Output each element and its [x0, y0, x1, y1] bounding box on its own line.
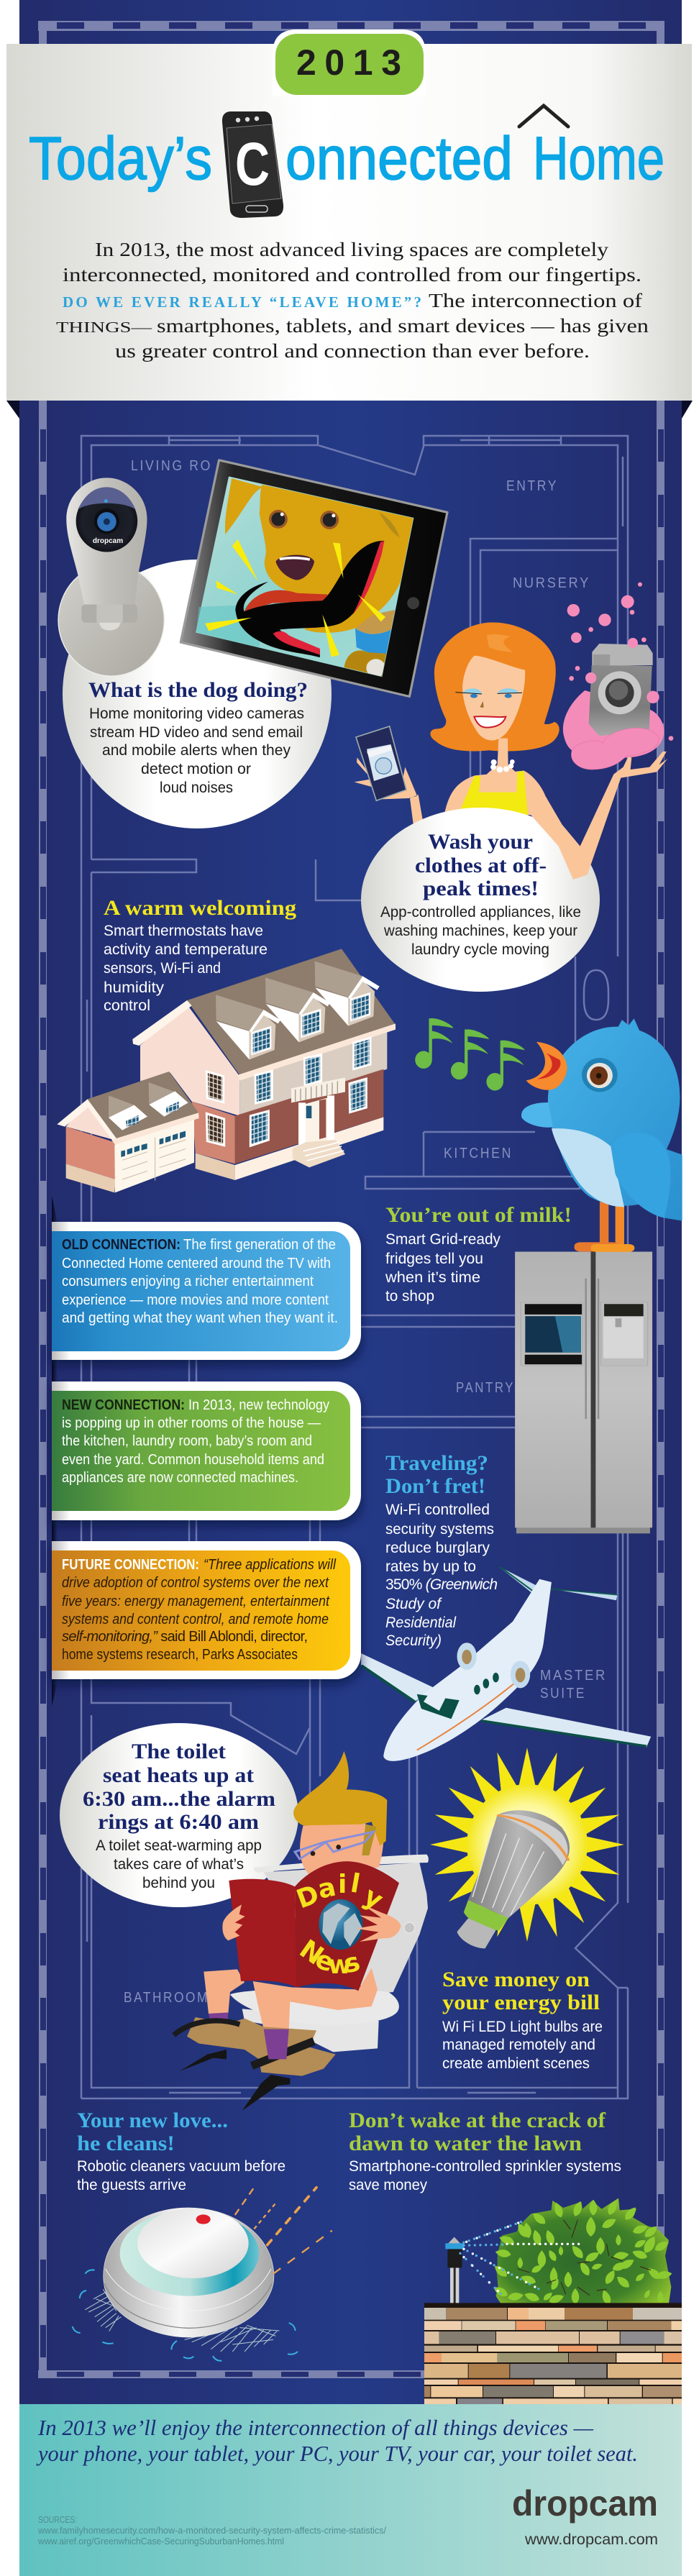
- text: milk: to shop: [385, 1288, 434, 1305]
- heading: your new love: Your new love...: [77, 2109, 228, 2132]
- icon: LED bulb: [430, 1748, 624, 1948]
- icon: tablet with dog: [181, 460, 447, 697]
- title: Home: [533, 124, 664, 192]
- stairs: [293, 1140, 345, 1167]
- body: [104, 2208, 274, 2337]
- panel: future connection: five years: energy management, entertainment: [62, 1594, 330, 1609]
- text: warm welcoming: activity and temperature: [104, 941, 268, 958]
- text: warm welcoming: control: [104, 997, 150, 1014]
- sources: [37, 2514, 386, 2547]
- heading: save money: your energy bill: [442, 1991, 600, 2014]
- icon: robot vacuum: [73, 2188, 332, 2361]
- foam front: [572, 728, 659, 769]
- panel: old connection: OLD CONNECTION:: [62, 1237, 181, 1253]
- icon: bluebird: [521, 1018, 682, 1252]
- text: save money: [442, 2019, 603, 2072]
- icon: house: [57, 949, 396, 1192]
- gable trim: [132, 1000, 192, 1046]
- text: wash: laundry cycle moving: [411, 941, 549, 958]
- text: don't wake: save money: [349, 2177, 427, 2193]
- icon: jet plane: [361, 1567, 651, 1761]
- hands: [222, 1904, 245, 1940]
- icon: dropcam camera: [58, 478, 164, 676]
- text: milk: [385, 1231, 501, 1305]
- text: milk: fridges tell you: [385, 1251, 483, 1267]
- text: traveling: reduce burglary: [385, 1540, 490, 1556]
- text: traveling: Security): [385, 1632, 442, 1649]
- intro paragraph: [56, 239, 649, 362]
- shoes: [180, 2050, 227, 2071]
- title: Today’s: [29, 124, 212, 192]
- heading: don't wake: [349, 2109, 606, 2155]
- front windows: [250, 1038, 370, 1146]
- heading: a warm welcoming: A warm welcoming: [104, 896, 296, 920]
- intro paragraph: DO WE EVER REALLY “LEAVE HOME”?: [63, 293, 421, 311]
- text: save money: managed remotely and: [442, 2037, 595, 2053]
- panel: new connection: [52, 1381, 362, 1526]
- sources: www.familyhomesecurity.com/how-a-monitored-security-system-affects-crime-statistics/: [37, 2525, 386, 2536]
- panel: new connection: the kitchen, laundry room, baby’s room and: [62, 1433, 312, 1449]
- icon: phone forming the letter C: [222, 111, 283, 218]
- text: save money: Wi Fi LED Light bulbs are: [442, 2019, 603, 2035]
- icon: music notes: [415, 1018, 525, 1090]
- heading: traveling: Traveling?: [385, 1451, 488, 1475]
- heading: toilet seat: 6:30 am...the alarm: [83, 1787, 275, 1811]
- banner folds: [6, 401, 19, 419]
- text: your new love: Robotic cleaners vacuum before: [77, 2158, 285, 2175]
- header banner: [6, 29, 693, 419]
- heading: save money: Save money on: [442, 1968, 590, 1991]
- icon: phone: [356, 726, 406, 800]
- intro paragraph: us greater control and connection than ever before.: [115, 340, 590, 362]
- label: living room: LIVING RO: [131, 458, 212, 474]
- bubble: toilet seat: [60, 1723, 298, 1907]
- columns: [298, 1102, 306, 1149]
- heading: toilet seat: The toilet: [132, 1740, 226, 1763]
- text: milk: when it’s time: [385, 1269, 480, 1286]
- text: traveling: Study of: [385, 1596, 442, 1612]
- panel: new connection: NEW CONNECTION:: [62, 1397, 185, 1413]
- woman's raised arm: [530, 752, 667, 880]
- necklace: [490, 759, 515, 772]
- text: milk: Smart Grid-ready: [385, 1231, 501, 1248]
- camera brand: dropcam: [93, 537, 123, 545]
- panel: new connection: even the yard. Common household items and: [62, 1452, 324, 1468]
- label: bathroom: BATHROOM: [124, 1990, 209, 2006]
- heading: your new love: [77, 2109, 228, 2155]
- label: entry: ENTRY: [506, 478, 558, 494]
- label: master suite: MASTER: [540, 1668, 607, 1684]
- heading: don't wake: Don’t wake at the crack of: [349, 2109, 606, 2132]
- text: toilet seat: behind you: [142, 1875, 215, 1891]
- text: toilet seat: A toilet seat-warming app: [96, 1837, 262, 1854]
- toilet: [230, 1855, 429, 2052]
- heading: wash your clothes: peak times!: [423, 877, 539, 900]
- text: wash: App-controlled appliances, like: [380, 904, 581, 921]
- panel: future connection: self-monitoring,” said Bill Ablondi, director,: [62, 1629, 308, 1645]
- text: dog: and mobile alerts when they: [102, 742, 291, 759]
- newspaper title: Daily: Daily: [293, 1868, 388, 1916]
- panel: future connection: FUTURE CONNECTION:: [62, 1557, 199, 1573]
- text: dog: loud noises: [160, 780, 233, 796]
- left arm and hand: [354, 757, 423, 826]
- legs: [204, 1968, 378, 2032]
- panel: new connection: appliances are now connected machines.: [62, 1470, 298, 1486]
- intro paragraph: smartphones, tablets, and smart devices — has given: [157, 315, 649, 337]
- text: traveling: security systems: [385, 1521, 494, 1538]
- mouth: [474, 716, 506, 728]
- side windows: [206, 1072, 224, 1146]
- text: warm welcoming: [104, 923, 268, 1014]
- panel: old connection: experience — more movies and more content: [62, 1292, 329, 1308]
- icon: phone forming the letter C: C: [235, 130, 270, 198]
- heading: don't wake: dawn to water the lawn: [349, 2132, 582, 2155]
- hair: [430, 623, 559, 752]
- dust marks: [73, 2270, 298, 2361]
- title: onnected: [285, 124, 513, 192]
- text: traveling: Wi-Fi controlled: [385, 1502, 490, 1518]
- text: dog: detect motion or: [141, 761, 251, 777]
- heading: wash your clothes: [415, 830, 547, 900]
- icon: washing machine: [589, 644, 653, 736]
- text: warm welcoming: sensors, Wi-Fi and: [104, 960, 221, 977]
- panel: old connection: Connected Home centered around the TV with: [62, 1256, 331, 1271]
- intro paragraph: In 2013, the most advanced living spaces are completely: [95, 239, 609, 260]
- icon: sprinkler: [445, 2237, 464, 2303]
- label: pantry: PANTRY: [456, 1380, 515, 1396]
- panel: new connection: In 2013, new technology: [188, 1397, 329, 1413]
- garage: [88, 1072, 198, 1141]
- panel: old connection: [52, 1222, 362, 1366]
- motion dashes: [235, 2188, 332, 2274]
- sources: SOURCES:: [38, 2514, 77, 2525]
- icon: shrub: [492, 2198, 672, 2306]
- intro paragraph: interconnected, monitored and controlled from our fingertips.: [63, 264, 641, 286]
- text: wash: washing machines, keep your: [383, 923, 577, 939]
- icon: roof chevron: [519, 106, 568, 127]
- icon: bubbles: [567, 583, 673, 741]
- intro paragraph: THINGS—: [56, 319, 152, 336]
- balcony: [291, 1077, 345, 1102]
- eyes: [462, 688, 482, 694]
- icon: foam cloud: [563, 690, 664, 769]
- porch door: [306, 1098, 327, 1142]
- eye: [582, 1058, 618, 1092]
- panel: future connection: systems and content control, and remote home: [62, 1612, 329, 1627]
- text: toilet seat: [96, 1837, 262, 1891]
- text: dog: [89, 705, 304, 796]
- foundation: [196, 1153, 235, 1180]
- wing right: [611, 1133, 670, 1218]
- belly: [552, 1128, 624, 1207]
- heading: what is the dog doing: What is the dog doing?: [88, 678, 308, 702]
- sprinkler water spray: [460, 2221, 582, 2298]
- closing statement: In 2013 we’ll enjoy the interconnection of all things devices —: [37, 2415, 593, 2440]
- lower brick walls: [235, 1069, 383, 1164]
- ring: [120, 2211, 259, 2296]
- closing statement: your phone, your tablet, your PC, your TV, your car, your toilet seat.: [36, 2441, 638, 2466]
- legs: [600, 1202, 608, 1246]
- panel: new connection: is popping up in other rooms of the house —: [62, 1415, 321, 1431]
- panel: old connection: consumers enjoying a richer entertainment: [62, 1274, 314, 1289]
- text: traveling: rates by up to: [385, 1558, 476, 1575]
- text: traveling: Residential: [385, 1614, 457, 1631]
- year pill: 2013: [296, 42, 401, 83]
- text: traveling: [385, 1502, 498, 1649]
- bubble: what is the dog doing: [63, 559, 332, 828]
- belts: [174, 2021, 239, 2035]
- floor plan lines: [81, 436, 630, 2098]
- text: your new love: [77, 2158, 285, 2193]
- heading: toilet seat: rings at 6:40 am: [98, 1810, 259, 1834]
- bristles: [85, 2289, 279, 2352]
- panel shadow strip: [52, 1196, 58, 1706]
- text: don't wake: Smartphone-controlled sprinkler systems: [349, 2158, 621, 2175]
- body: [548, 1027, 682, 1221]
- heading: your new love: he cleans!: [77, 2132, 175, 2155]
- text: warm welcoming: Smart thermostats have: [104, 923, 263, 939]
- crest: [618, 1018, 642, 1036]
- label: kitchen: KITCHEN: [444, 1146, 513, 1161]
- upper front wall: [239, 1032, 387, 1116]
- text: toilet seat: takes care of what’s: [114, 1856, 244, 1873]
- label: suite: SUITE: [540, 1686, 586, 1702]
- hair and face: [293, 1751, 387, 1875]
- label: nursery: NURSERY: [513, 575, 590, 591]
- neck: [487, 739, 518, 775]
- heading: out of milk: You’re out of milk!: [385, 1203, 572, 1227]
- text: wash: [380, 904, 581, 958]
- sources: www.airef.org/GreenwhichCase-SecuringSuburbanHomes.html: [37, 2536, 284, 2547]
- panel: old connection: and getting what they want when they want it.: [62, 1310, 338, 1326]
- room labels: [124, 458, 607, 2006]
- dropcam logo: dropcam: [512, 2483, 658, 2524]
- face: [462, 656, 525, 741]
- text: save money: create ambient scenes: [442, 2055, 590, 2072]
- year pill: [273, 29, 426, 96]
- text: traveling: 350% (Greenwich: [385, 1576, 498, 1593]
- dress: [460, 771, 528, 815]
- panel: future connection: [52, 1541, 362, 1685]
- text: dog: Home monitoring video cameras: [89, 705, 304, 722]
- dome: [137, 2209, 249, 2278]
- text: your new love: the guests arrive: [77, 2177, 186, 2193]
- pants: [187, 2017, 336, 2076]
- closing statement: [36, 2415, 638, 2466]
- title: [29, 124, 664, 192]
- panel: future connection: home systems research, Parks Associates: [62, 1647, 298, 1663]
- heading: toilet seat: [83, 1740, 275, 1834]
- website: www.dropcam.com: [524, 2531, 658, 2548]
- gable wall: [140, 1005, 239, 1116]
- text: warm welcoming: humidity: [104, 979, 165, 996]
- roof: [187, 949, 396, 1075]
- torso: [444, 771, 545, 815]
- heading: traveling: [385, 1451, 488, 1498]
- panel: old connection: The first generation of the: [183, 1237, 336, 1253]
- panel: future connection: “Three applications will: [204, 1557, 336, 1573]
- intro paragraph: The interconnection of: [429, 290, 642, 311]
- panel: future connection: drive adoption of control systems over the next: [62, 1575, 329, 1591]
- man on toilet reading newspaper: [174, 1751, 429, 2111]
- heading: toilet seat: seat heats up at: [103, 1763, 254, 1787]
- heading: wash your clothes: Wash your: [428, 830, 533, 854]
- heading: save money: [442, 1968, 600, 2014]
- banner panel: [6, 44, 692, 401]
- red light: [196, 2214, 211, 2224]
- heading: wash your clothes: clothes at off-: [415, 854, 547, 877]
- wing left: [521, 1102, 553, 1128]
- text: dog: stream HD video and send email: [90, 724, 303, 741]
- heading: traveling: Don’t fret!: [385, 1474, 485, 1498]
- bubble: wash your clothes: [361, 808, 600, 992]
- woman with washing machine: [354, 583, 673, 826]
- text: don't wake: [349, 2158, 621, 2193]
- stone wall: [424, 2303, 682, 2404]
- dormers: [216, 995, 280, 1059]
- beak: [526, 1042, 567, 1090]
- newspaper: [229, 1861, 399, 1991]
- footer panel: [19, 2404, 682, 2576]
- icon: refrigerator: [515, 1252, 652, 1533]
- newspaper title: News: News: [294, 1935, 363, 1980]
